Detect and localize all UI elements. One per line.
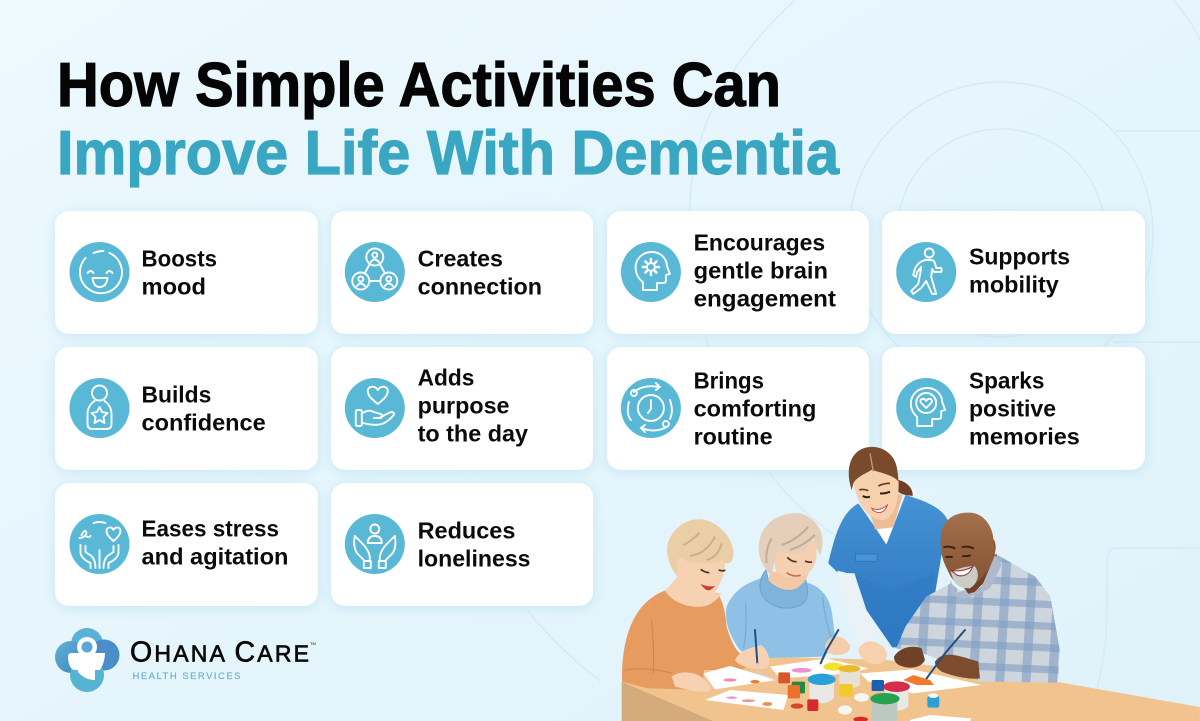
- man collar: [951, 555, 1002, 599]
- hands: [672, 636, 980, 692]
- icon: head with gear: [621, 242, 681, 302]
- icon: head with heart: [896, 378, 956, 438]
- icon: walking person: [896, 242, 956, 302]
- woman sweater orange: [622, 590, 757, 690]
- title: How Simple Activities Can: [57, 51, 781, 120]
- illustration: seniors painting with a nurse: [622, 447, 1200, 721]
- logo: Ohana Care: TM: [310, 641, 316, 646]
- icon: hands with heart and squiggle: [70, 514, 130, 574]
- panel: eases stress and agitation: and agitation: [142, 544, 288, 570]
- paper sheets: [703, 658, 982, 721]
- woman head orange sweater: [665, 519, 734, 607]
- table: [622, 657, 1200, 721]
- logo: Ohana Care: [55, 628, 316, 692]
- panel: sparks positive memories: memories: [969, 424, 1080, 450]
- painting supplies and hands: [672, 630, 982, 721]
- paint brushes: [755, 630, 965, 680]
- panel: boosts mood: Boosts: [142, 246, 217, 272]
- icon: smiling face: [70, 242, 130, 302]
- panel: brings comforting routine: Brings: [694, 368, 764, 394]
- icon: connected people: [345, 242, 405, 302]
- nurse head: [849, 447, 913, 529]
- panel: brings comforting routine: routine: [694, 424, 773, 450]
- man shirt: [896, 555, 1060, 683]
- icon: person with star: [70, 378, 130, 438]
- panel: adds purpose to the day: Adds: [418, 364, 474, 390]
- panel: sparks positive memories: Sparks: [969, 368, 1044, 394]
- logo: Ohana Care: OHANA CARE: [130, 636, 309, 668]
- woman head blue sweater: [759, 513, 823, 608]
- panel: builds confidence: [55, 347, 318, 470]
- panel: supports mobility: mobility: [969, 272, 1059, 298]
- panel: eases stress and agitation: [55, 483, 318, 606]
- panel: boosts mood: mood: [142, 274, 206, 300]
- panel: supports mobility: Supports: [969, 244, 1070, 270]
- icon: hand holding heart: [345, 378, 405, 438]
- panel: creates connection: connection: [418, 274, 542, 300]
- panel: encourages gentle brain engagement: engagement: [694, 286, 836, 312]
- decorative outline pattern: [527, 0, 1200, 721]
- icon: hands around person: [345, 514, 405, 574]
- panel: brings comforting routine: [607, 347, 869, 470]
- panel: supports mobility: [882, 211, 1145, 334]
- panel: creates connection: Creates: [418, 246, 503, 272]
- panel: encourages gentle brain engagement: gentle brain: [694, 258, 828, 284]
- panel: boosts mood: [55, 211, 318, 334]
- nurse body: [828, 495, 948, 647]
- jars and pots: [778, 665, 939, 721]
- panel: encourages gentle brain engagement: Encourages: [694, 230, 825, 256]
- title: [57, 51, 839, 188]
- icon: cross in clover: [55, 628, 120, 692]
- figure bodies: [622, 495, 1060, 690]
- panel: reduces loneliness: loneliness: [418, 546, 530, 572]
- panel: adds purpose to the day: [331, 347, 593, 470]
- panel: encourages gentle brain engagement: [607, 211, 869, 334]
- man head: [941, 513, 997, 597]
- panel: sparks positive memories: [882, 347, 1145, 470]
- icon: clock with cycle arrows: [621, 378, 681, 438]
- logo: Ohana Care: HEALTH SERVICES: [132, 671, 240, 682]
- panel: adds purpose to the day: purpose: [418, 392, 510, 418]
- panel: creates connection: [331, 211, 593, 334]
- panel: reduces loneliness: [331, 483, 593, 606]
- title: Improve Life With Dementia: [57, 119, 839, 188]
- panel: brings comforting routine: comforting: [694, 396, 816, 422]
- paint splashes: [723, 663, 934, 706]
- panel: builds confidence: confidence: [142, 410, 266, 436]
- panel: sparks positive memories: positive: [969, 396, 1056, 422]
- panel: adds purpose to the day: to the day: [418, 420, 528, 446]
- panel: builds confidence: Builds: [142, 382, 211, 408]
- panel: eases stress and agitation: Eases stress: [142, 516, 279, 542]
- panel: reduces loneliness: Reduces: [418, 518, 515, 544]
- woman sweater blue: [726, 578, 836, 658]
